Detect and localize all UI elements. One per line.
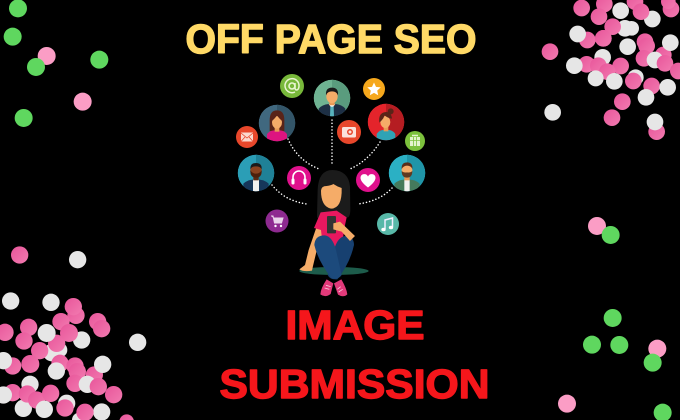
face	[321, 184, 342, 209]
connector: top	[331, 120, 333, 165]
icon: shopping cart	[266, 210, 288, 232]
far leg	[328, 236, 354, 279]
hair	[317, 170, 350, 219]
confetti: bottom right	[558, 217, 672, 420]
avatar: woman with bun, upper right	[368, 104, 404, 140]
connector: lower left	[272, 185, 307, 204]
connector: upper left	[288, 139, 319, 169]
icon: star	[363, 78, 385, 100]
right shoe	[334, 279, 347, 296]
confetti: top right	[542, 0, 680, 140]
avatar: man with tie, top	[314, 80, 350, 116]
icon: envelope	[236, 126, 258, 148]
icon: gift	[405, 131, 425, 151]
confetti: top left	[4, 0, 108, 127]
avatar: woman, upper left	[259, 105, 295, 141]
icon: music note	[377, 213, 399, 235]
shirt	[314, 211, 347, 257]
heading: submission: SUBMISSION	[220, 361, 490, 407]
icon: headphones	[287, 166, 311, 190]
icon: camera	[337, 120, 361, 144]
left arm	[299, 227, 325, 271]
avatar: bearded man, right	[389, 155, 425, 191]
avatar: dark-skinned man, left	[238, 155, 274, 191]
near leg	[314, 235, 342, 279]
title: off page seo: OFF PAGE SEO	[186, 16, 476, 62]
confetti: bottom left	[0, 246, 146, 420]
heading: image: IMAGE	[286, 302, 424, 348]
icon: heart	[356, 168, 380, 192]
left shoe	[320, 279, 333, 296]
phone	[327, 216, 336, 233]
right arm and hand	[333, 222, 355, 241]
shoe laces	[325, 285, 343, 292]
ground shadow	[299, 267, 369, 275]
central figure: seated woman with phone	[299, 170, 369, 296]
icon: at sign	[280, 74, 304, 98]
connector: upper right	[350, 142, 380, 169]
connector: lower right	[358, 188, 392, 204]
